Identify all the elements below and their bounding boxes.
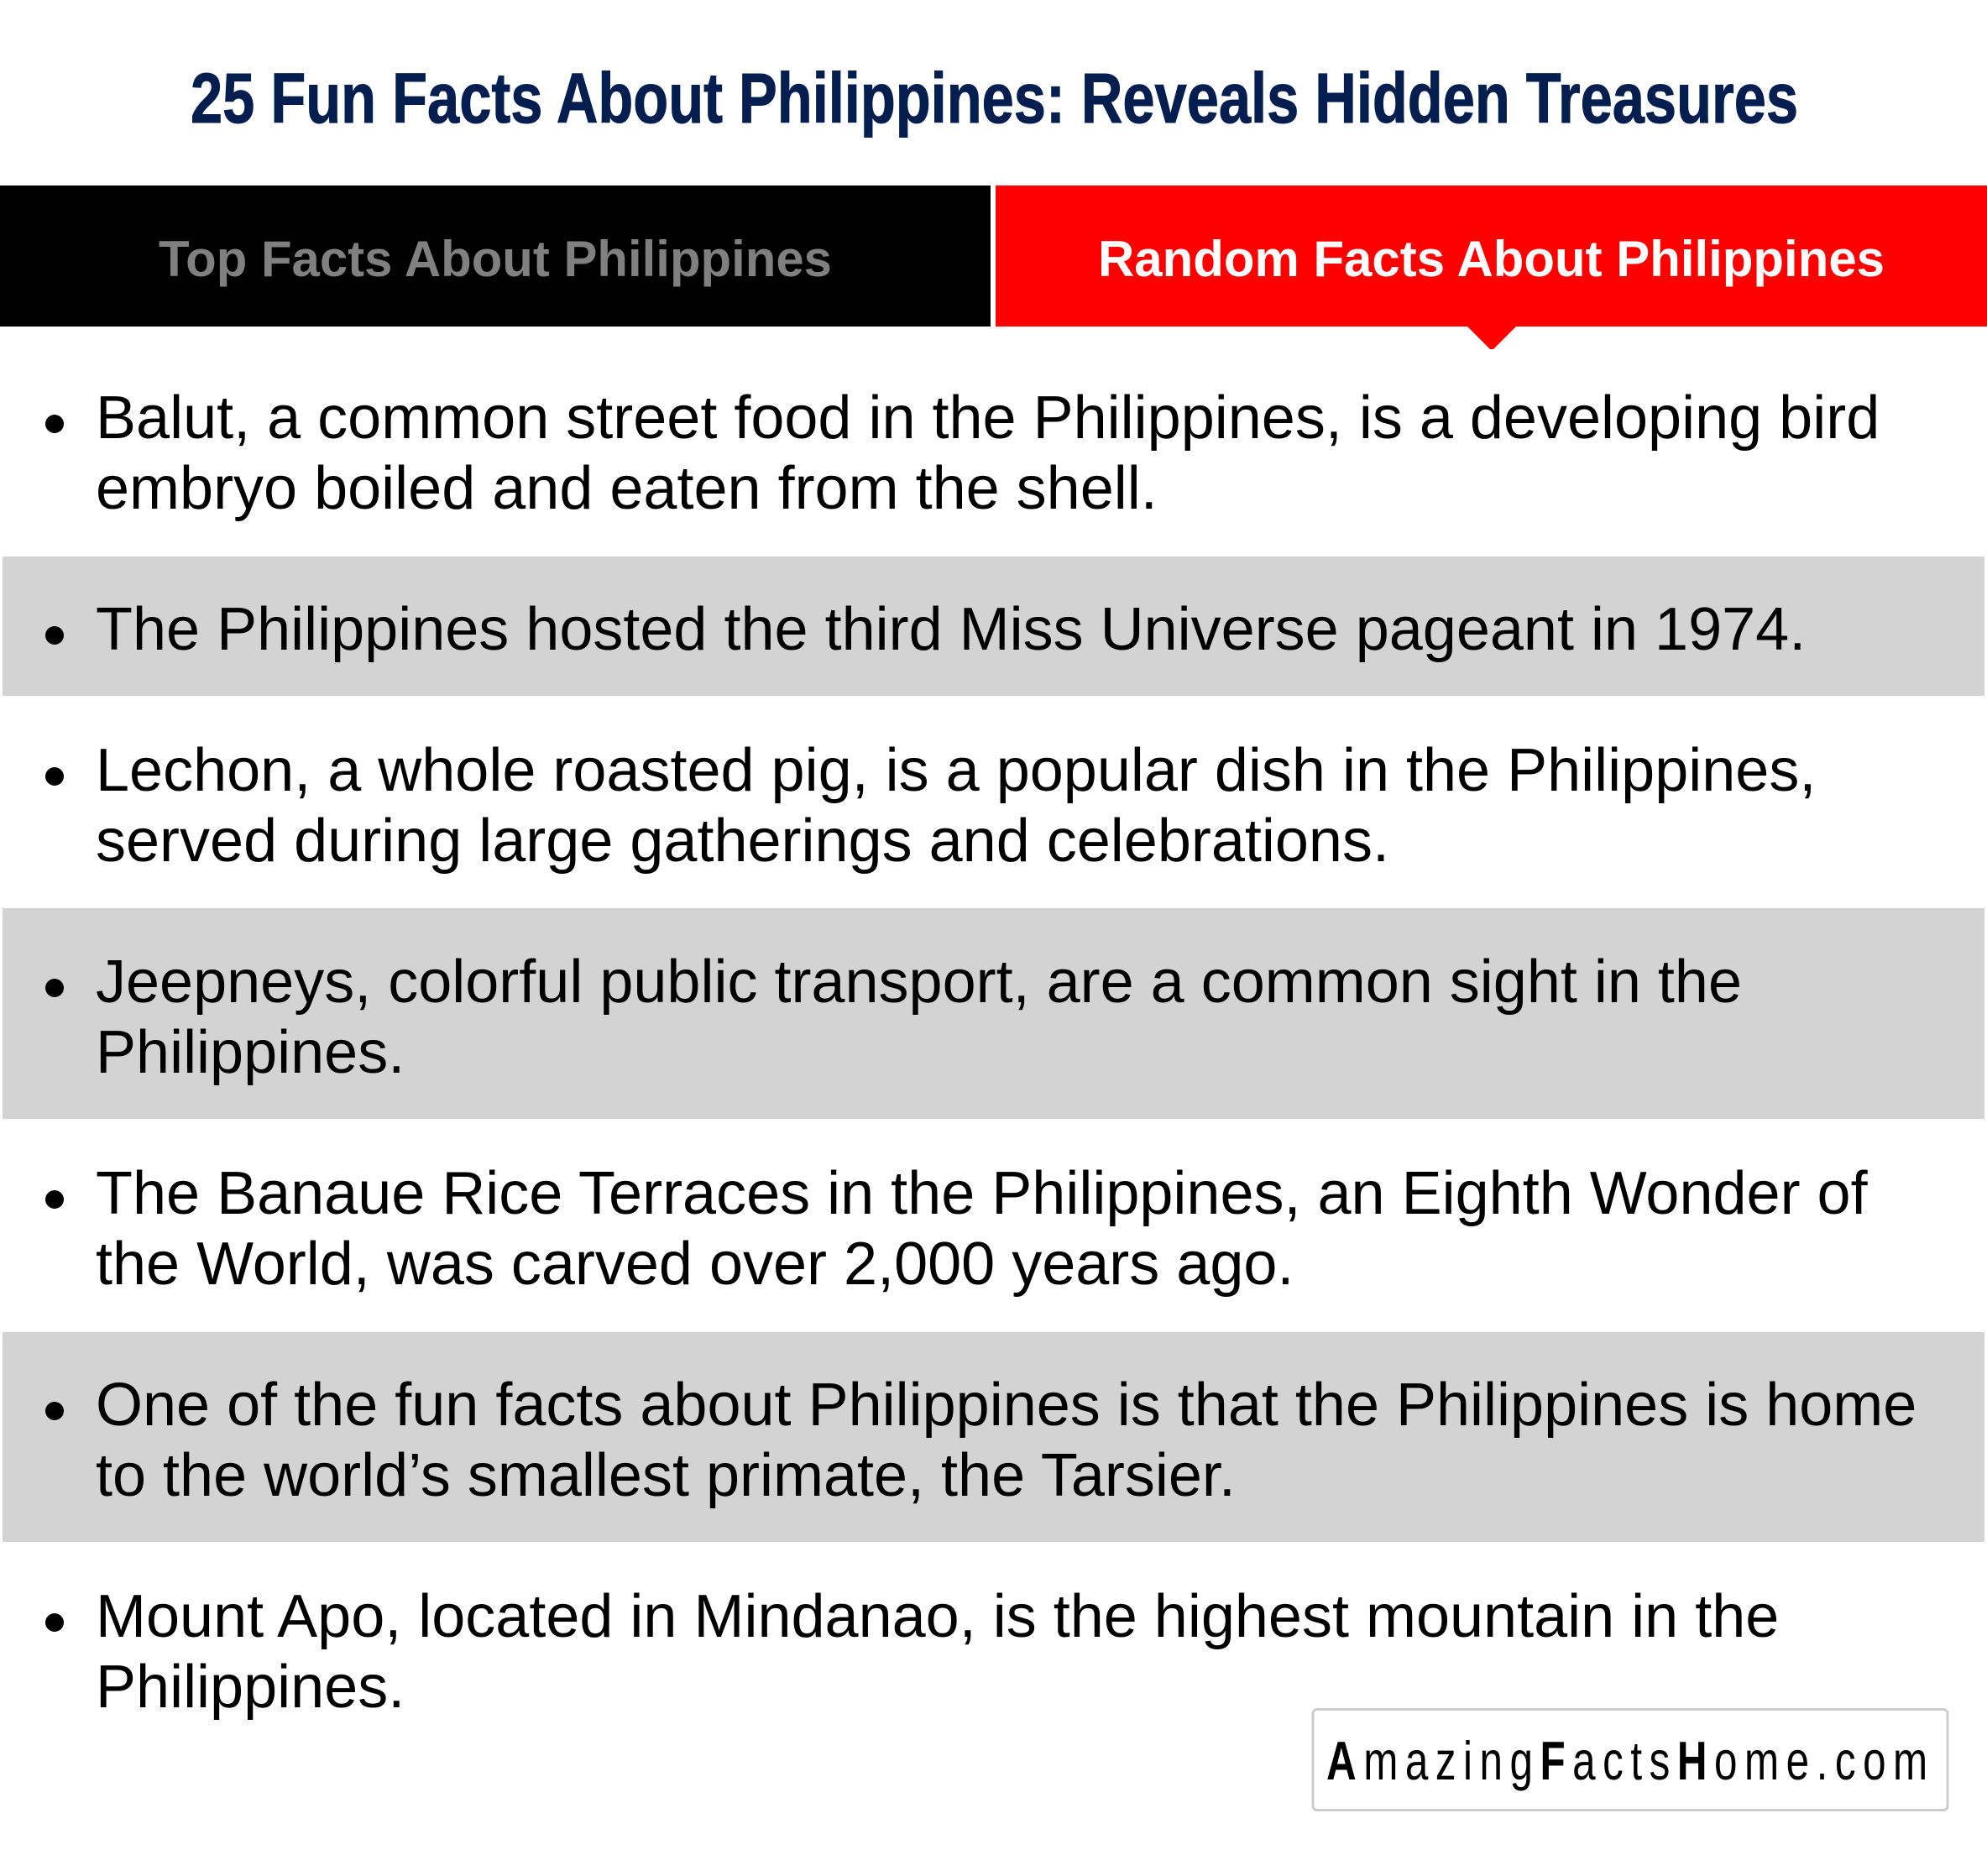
tab: random facts (active) [996, 186, 1987, 349]
tab: random facts (active): Random Facts About Philippines [1098, 231, 1885, 287]
fact 4: jeepneys: Philippines. [96, 1019, 405, 1086]
fact 3: lechon [45, 737, 1816, 875]
fact 3: lechon: served during large gatherings and celebrations. [96, 807, 1389, 875]
tab: top facts: Top Facts About Philippines [159, 231, 832, 287]
fact 5: banaue rice terraces [45, 1160, 1869, 1298]
fact 2: miss universe [3, 557, 1984, 696]
fact 6: tarsier: One of the fun facts about Philippines is that the Philippines is home [96, 1372, 1916, 1439]
logo: AmazingFactsHome.com: AmazingFactsHome.com [1326, 1732, 1935, 1792]
fact 4: jeepneys: Jeepneys, colorful public transport, are a common sight in the [96, 948, 1742, 1016]
fact 7: mount apo: Mount Apo, located in Mindanao, is the highest mountain in the [96, 1583, 1779, 1650]
fact 5: banaue rice terraces: The Banaue Rice Terraces in the Philippines, an Eighth Wonder of [96, 1160, 1869, 1227]
fact 1: balut: embryo boiled and eaten from the shell. [96, 455, 1158, 522]
logo: AmazingFactsHome.com [1313, 1709, 1948, 1810]
fact 7: mount apo [45, 1583, 1779, 1721]
fact 3: lechon: Lechon, a whole roasted pig, is a popular dish in the Philippines, [96, 737, 1816, 804]
fact 2: miss universe: The Philippines hosted the third Miss Universe pageant in 1974. [96, 596, 1806, 663]
fact 1: balut [45, 384, 1880, 522]
fact 6: tarsier: to the world’s smallest primate, the Tarsier. [96, 1442, 1236, 1509]
fact 4: jeepneys [3, 908, 1984, 1119]
fact 5: banaue rice terraces: the World, was carved over 2,000 years ago. [96, 1231, 1294, 1298]
tab: top facts [0, 186, 991, 327]
fact 1: balut: Balut, a common street food in the Philippines, is a developing bird [96, 384, 1880, 452]
fact 6: tarsier [3, 1332, 1984, 1542]
fact 7: mount apo: Philippines. [96, 1654, 405, 1721]
